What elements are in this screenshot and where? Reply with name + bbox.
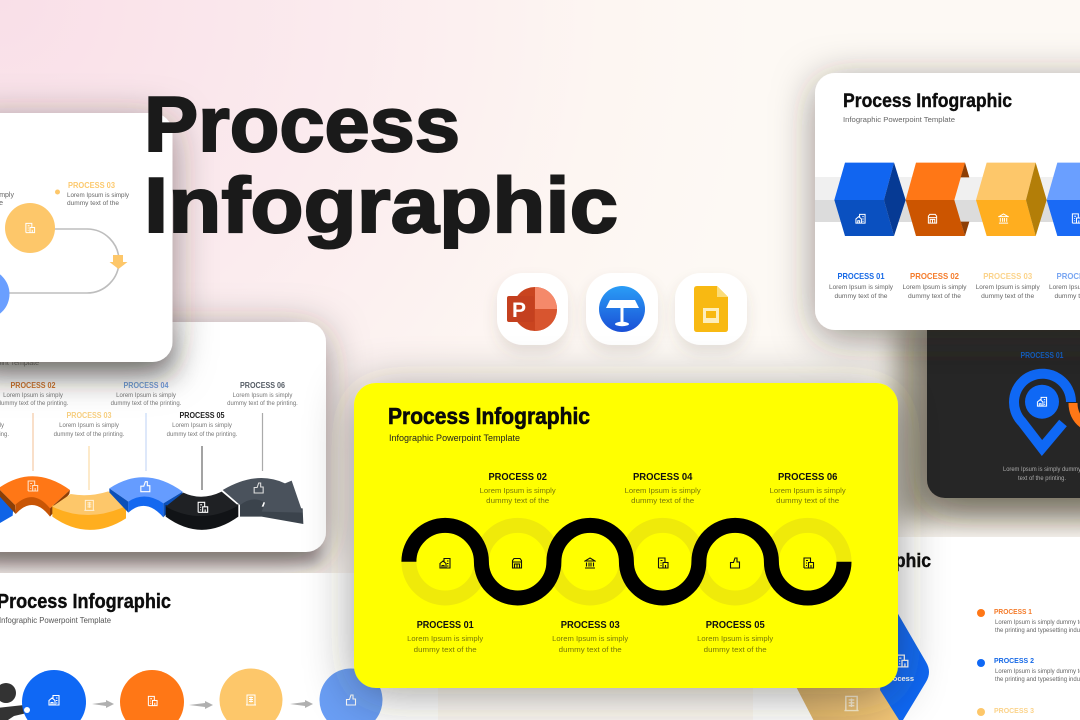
text: pin description bbox=[1003, 467, 1080, 482]
label: process 03 bbox=[552, 620, 628, 654]
panel: top right cubes slide bbox=[815, 73, 1080, 330]
segment: black bbox=[166, 492, 238, 530]
label: process 06 bbox=[770, 472, 846, 505]
arrow: down bbox=[110, 255, 128, 269]
label: process 04 bbox=[111, 381, 182, 407]
title bbox=[144, 80, 618, 249]
arrow lines up to labels bbox=[33, 413, 262, 490]
panel: curved 3D wave slide bbox=[0, 322, 326, 552]
label: process 03 bbox=[67, 181, 130, 207]
label: process 03: Lorem Ipsum is simply bbox=[59, 423, 119, 429]
text: process 01 remnant bbox=[0, 423, 9, 438]
circle: yellow step bbox=[5, 203, 55, 253]
heading: bottom left slide title: Process Infographic bbox=[0, 591, 171, 613]
label: process 02: Lorem Ipsum is simply bbox=[3, 393, 63, 399]
subtitle: top right slide: Infographic Powerpoint Template bbox=[843, 115, 955, 124]
panel: bottom left circles slide bbox=[0, 573, 438, 720]
label: process 03: dummy text of the printing. bbox=[54, 432, 125, 438]
label: process 03: Lorem Ipsum is simply bbox=[976, 284, 1040, 291]
label: process 02: dummy text of the bbox=[486, 496, 549, 505]
label: process 02 bbox=[902, 271, 967, 300]
label: process 03: dummy text of the bbox=[559, 645, 622, 654]
cube: light blue bbox=[1047, 163, 1080, 236]
dot marker bbox=[55, 190, 60, 194]
label: process 02: dummy text of the bbox=[908, 293, 961, 300]
band behind cubes bbox=[815, 177, 1080, 222]
circle: yellow step bbox=[219, 668, 282, 720]
label: process 03: Lorem Ipsum is simply bbox=[67, 192, 130, 199]
label: process 01: PROCESS 01 bbox=[417, 620, 474, 631]
label: process 03: dummy text of the bbox=[981, 293, 1035, 300]
icon: google slides app bbox=[675, 273, 747, 345]
label: process 02: PROCESS 02 bbox=[910, 271, 959, 281]
text remnant: process 02 bbox=[0, 192, 14, 207]
list item 3: PROCESS 3 bbox=[994, 706, 1034, 715]
ribbon icons bbox=[28, 481, 263, 512]
segment: orange bbox=[0, 476, 70, 517]
label: process 03 bbox=[976, 271, 1040, 300]
label: process 02 bbox=[480, 472, 556, 505]
label: process 02: Lorem Ipsum is simply bbox=[480, 486, 556, 495]
label: process 01: dummy text of the bbox=[414, 645, 477, 654]
hexagon: blue process bbox=[880, 600, 929, 720]
label: process 03: PROCESS 03 bbox=[68, 181, 116, 190]
label: process 04: Lorem Ipsum is simply bbox=[625, 486, 701, 495]
cube icons bbox=[856, 214, 1080, 223]
segment: yellow bbox=[52, 491, 126, 530]
icon: powerpoint app bbox=[497, 273, 568, 345]
label: process 05: dummy text of the bbox=[704, 645, 767, 654]
label: process 05: Lorem Ipsum is simply bbox=[172, 423, 232, 429]
label: process 02: Lorem Ipsum is simply bbox=[902, 284, 967, 291]
connector path bbox=[8, 229, 119, 293]
title: Infographic bbox=[144, 161, 618, 249]
label: process 04 bbox=[1049, 271, 1080, 300]
label: process 05 bbox=[167, 411, 238, 438]
label: process 04: Lorem Ipsum is simply bbox=[116, 393, 176, 399]
label: process 06: Lorem Ipsum is simply bbox=[770, 486, 846, 495]
subtitle: yellow slide: Infographic Powerpoint Template bbox=[389, 433, 520, 443]
segment: blue bbox=[0, 493, 13, 525]
chart: cube row bbox=[834, 163, 1080, 236]
hexagon: tan output bbox=[790, 675, 900, 720]
label: process 01: PROCESS 01 bbox=[1020, 351, 1064, 360]
list item 3 bbox=[977, 706, 1034, 716]
label: process 06: dummy text of the printing. bbox=[227, 401, 298, 407]
cube: orange bbox=[906, 163, 969, 236]
title: Process bbox=[144, 80, 460, 168]
arrow: step two to three bbox=[189, 701, 213, 709]
arrow: step one to two bbox=[92, 700, 114, 708]
hexagon: blue process: Process bbox=[885, 674, 914, 683]
label: process 06: PROCESS 06 bbox=[778, 472, 838, 483]
label: process 05: PROCESS 05 bbox=[180, 411, 225, 420]
heading: top right slide title: Process Infographic bbox=[843, 90, 1012, 112]
icon: powerpoint app: P bbox=[512, 299, 526, 322]
panel: main yellow slide bbox=[354, 383, 898, 688]
label: process 02 bbox=[0, 381, 69, 407]
circle: blue step bbox=[0, 269, 10, 319]
text: pin description: text of the printing. bbox=[1018, 476, 1066, 482]
circle: light blue step bbox=[320, 668, 383, 720]
subtitle: bottom left slide: Infographic Powerpoint Template bbox=[0, 616, 112, 625]
label: process 04: PROCESS 04 bbox=[633, 472, 693, 483]
list item 2: PROCESS 2 bbox=[994, 656, 1034, 665]
panel: top left slide bbox=[0, 113, 172, 362]
circle: orange step bbox=[120, 670, 184, 720]
label: process 03: dummy text of the bbox=[67, 200, 119, 207]
label: process 05 bbox=[697, 620, 773, 654]
icon: person bbox=[0, 683, 28, 720]
heading: bottom right slide title: Process Infographic bbox=[762, 550, 931, 572]
label: process 03: PROCESS 03 bbox=[66, 411, 112, 420]
list item 2 bbox=[977, 656, 1080, 683]
icon: location pin bbox=[1014, 374, 1071, 448]
label: process 06: Lorem Ipsum is simply bbox=[233, 393, 292, 399]
icon: keynote app bbox=[586, 273, 658, 345]
label: process 06: PROCESS 06 bbox=[240, 381, 285, 390]
label: process 04: PROCESS 04 bbox=[124, 381, 169, 390]
heading: yellow slide title: Process Infographic bbox=[388, 403, 590, 429]
label: process 03 bbox=[54, 411, 125, 438]
chart: background rings bbox=[409, 525, 844, 598]
label: process 03: Lorem Ipsum is simply bbox=[552, 634, 628, 643]
label: process 04: dummy text of the bbox=[631, 496, 694, 505]
label: process 02: PROCESS 02 bbox=[488, 472, 547, 483]
label: process 04 bbox=[625, 472, 701, 505]
label: process 01 bbox=[407, 620, 483, 654]
label: process 01 bbox=[829, 271, 894, 300]
label: process 04: dummy text of the printing. bbox=[111, 401, 182, 407]
chart: black wave bbox=[409, 525, 844, 598]
label: process 03: PROCESS 03 bbox=[983, 271, 1032, 281]
arrow: step three to four bbox=[290, 700, 313, 708]
step icons bbox=[440, 558, 814, 568]
label: process 05: dummy text of the printing. bbox=[167, 432, 238, 438]
label: process 02: PROCESS 02 bbox=[10, 381, 56, 390]
icon: orange arc bbox=[1073, 403, 1080, 426]
chart: 3D curved ribbon bbox=[0, 476, 303, 530]
cube: blue bbox=[834, 163, 906, 236]
list item 1: PROCESS 1 bbox=[994, 607, 1032, 616]
panel: bottom right list slide bbox=[753, 537, 1080, 720]
label: process 01: PROCESS 01 bbox=[838, 271, 885, 281]
label: process 01: dummy text of the bbox=[834, 293, 888, 300]
panel: dark pin slide bbox=[927, 300, 1080, 498]
list item 1 bbox=[977, 607, 1080, 634]
label: process 01: Lorem Ipsum is simply bbox=[407, 634, 483, 643]
label: process 01: Lorem Ipsum is simply bbox=[829, 284, 894, 291]
label: process 06 bbox=[227, 381, 298, 407]
label: process 05: PROCESS 05 bbox=[706, 620, 765, 631]
segment: grey arrow bbox=[223, 478, 303, 524]
label: process 05: Lorem Ipsum is simply bbox=[697, 634, 773, 643]
label: process 06: dummy text of the bbox=[776, 496, 839, 505]
cube: yellow bbox=[976, 163, 1047, 236]
label: process 03: PROCESS 03 bbox=[561, 620, 620, 631]
segment: light blue bbox=[109, 477, 183, 517]
circle: blue step bbox=[22, 670, 86, 720]
